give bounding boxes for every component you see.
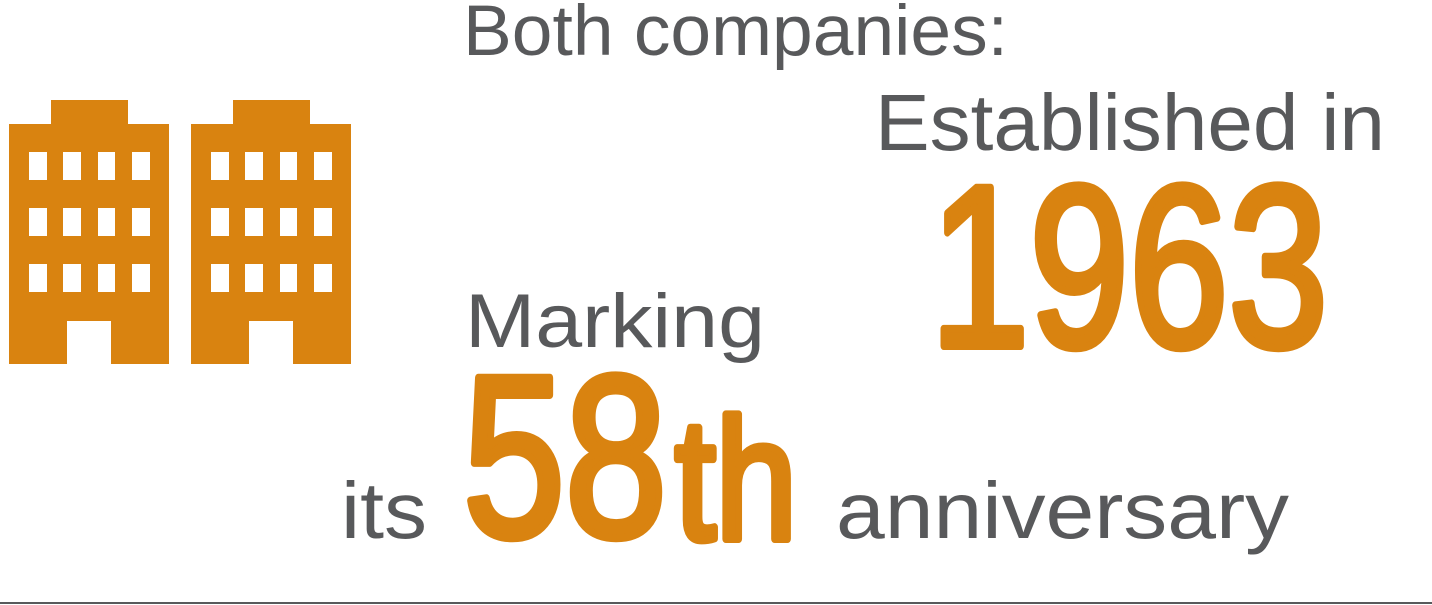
icon: two office buildings — [9, 100, 351, 364]
text: established in: Established in — [875, 78, 1385, 167]
number: 1963: 1963 — [930, 138, 1328, 395]
text: its: its — [341, 466, 427, 555]
number: 58: 58 — [463, 328, 667, 585]
text: anniversary: anniversary — [836, 466, 1289, 555]
text: marking: Marking — [465, 279, 765, 364]
ordinal suffix: th: th — [675, 384, 797, 576]
